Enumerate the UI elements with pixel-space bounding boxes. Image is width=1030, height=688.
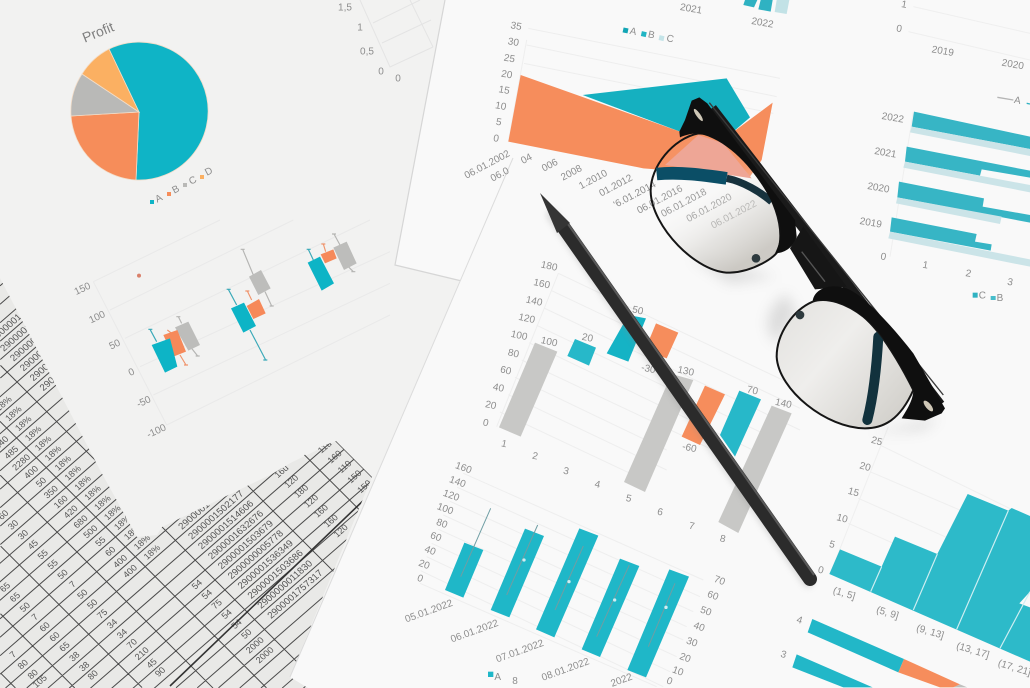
panel: spreadsheet table: 80 bbox=[85, 668, 100, 682]
panel: spreadsheet table: 18% bbox=[33, 434, 53, 453]
waterfall bar chart: 160 bbox=[532, 277, 551, 292]
teal column chart: 30 bbox=[685, 636, 699, 650]
panel: spreadsheet table: 11u bbox=[316, 439, 334, 455]
panel: spreadsheet table: 400 bbox=[111, 553, 129, 570]
panel: spreadsheet table: 75 bbox=[209, 597, 224, 611]
histogram: 15 bbox=[847, 486, 861, 500]
area date axis: 006 bbox=[540, 157, 560, 174]
area date axis: 06.0 bbox=[489, 165, 512, 184]
horizontal bar chart: 3 bbox=[1006, 277, 1014, 289]
histogram: 4 bbox=[795, 615, 804, 627]
teal column chart: 3 bbox=[562, 466, 570, 478]
right lens bbox=[777, 300, 913, 428]
panel: spreadsheet table: 18% bbox=[82, 483, 103, 502]
bars 2019 bbox=[890, 217, 992, 251]
panel: spreadsheet table: 2900000011830 bbox=[256, 558, 315, 611]
top axis labels and bars bbox=[679, 0, 789, 31]
panel: spreadsheet table: 2900001502177 bbox=[186, 489, 246, 542]
panel: spreadsheet table: 54 bbox=[199, 588, 214, 601]
teal column chart bbox=[404, 460, 727, 688]
panel: spreadsheet table: 50 bbox=[75, 587, 90, 601]
teal column chart: 05.01.2022 bbox=[404, 598, 455, 625]
area chart: 35 bbox=[510, 20, 523, 33]
waterfall bar chart: 130 bbox=[676, 365, 695, 379]
panel: spreadsheet table: 2900001514606 bbox=[8, 311, 68, 364]
legend: C bbox=[979, 290, 986, 301]
panel: area chart sheet bbox=[395, 0, 1030, 420]
temple seen through left lens bbox=[657, 173, 727, 178]
panel: spreadsheet table: 110 bbox=[336, 459, 353, 475]
panel: spreadsheet table: 18% bbox=[92, 493, 113, 512]
box plot chart bbox=[73, 220, 390, 441]
top axis labels and bars: 2021 bbox=[679, 2, 703, 17]
histogram: 5 bbox=[828, 539, 837, 551]
horizontal bar chart: 2019 bbox=[931, 44, 955, 59]
panel: spreadsheet table: 2900001514606 bbox=[196, 499, 256, 552]
histogram: (9, 13] bbox=[915, 623, 945, 642]
panel: spreadsheet table: 160 bbox=[325, 448, 344, 465]
panel: spreadsheet table: 7 bbox=[67, 579, 78, 589]
left brow bbox=[679, 97, 797, 253]
panel: spreadsheet table: 120 bbox=[282, 473, 301, 490]
histogram: 20 bbox=[858, 461, 872, 474]
box plot chart: 100 bbox=[87, 309, 108, 326]
panel: spreadsheet table: 400 bbox=[22, 464, 40, 481]
panel: spreadsheet table: 160 bbox=[322, 512, 340, 529]
teal column chart: 0 bbox=[416, 573, 425, 585]
histogram: (1, 5] bbox=[832, 585, 857, 603]
area chart: 25 bbox=[503, 53, 516, 65]
area date axis: 06.01.2022 bbox=[709, 198, 759, 232]
left lens tint over orange bbox=[665, 135, 752, 178]
area series teal bbox=[583, 78, 750, 142]
panel: spreadsheet table: 2900000005778 bbox=[226, 528, 286, 582]
panel: spreadsheet table: 45 bbox=[144, 657, 159, 670]
bars 2021 bbox=[905, 147, 1030, 178]
horizontal bar chart: 2021 bbox=[873, 146, 898, 161]
teal column chart: 8 bbox=[512, 676, 518, 687]
teal column chart: 60 bbox=[429, 530, 443, 545]
panel: spreadsheet table: 55 bbox=[45, 558, 60, 571]
teal column chart: 80 bbox=[435, 517, 449, 531]
glasses bbox=[651, 97, 945, 433]
area legend bbox=[623, 26, 675, 45]
panel: spreadsheet table: 45 bbox=[26, 538, 40, 551]
waterfall bar chart: 2 bbox=[531, 451, 539, 463]
panel: spreadsheet table: 485 bbox=[2, 444, 20, 461]
panel: spreadsheet table: 60 bbox=[103, 545, 118, 558]
panel: spreadsheet table: 2000 bbox=[254, 645, 276, 665]
panel: spreadsheet table: 50 bbox=[34, 475, 48, 489]
left lens bbox=[651, 133, 780, 273]
area chart: 10 bbox=[494, 100, 508, 113]
panel: spreadsheet table: 160 bbox=[52, 493, 70, 510]
panel: spreadsheet table: 150 bbox=[355, 478, 374, 495]
area date axis: 01.2012 bbox=[597, 172, 635, 199]
waterfall bar chart: -60 bbox=[681, 441, 698, 455]
teal column chart: A bbox=[494, 672, 501, 683]
right brow bbox=[813, 286, 945, 421]
area chart: 5 bbox=[495, 117, 503, 129]
area date axis: '6.01.2014 bbox=[612, 179, 658, 211]
panel: spreadsheet table: 75 bbox=[95, 607, 110, 621]
teal column chart: 6 bbox=[656, 507, 664, 519]
teal column chart: 50 bbox=[699, 605, 713, 619]
panel: spreadsheet table: 70 bbox=[125, 637, 139, 650]
panel: spreadsheet table: 680 bbox=[71, 513, 90, 530]
area chart: 0 bbox=[492, 133, 500, 145]
horizontal bar chart: 2020 bbox=[866, 181, 891, 196]
panel: spreadsheet table: 2900001502177 bbox=[28, 330, 88, 384]
teal column chart: 20 bbox=[417, 558, 432, 572]
waterfall bar chart: -30 bbox=[640, 362, 657, 376]
temple arm bbox=[712, 108, 940, 405]
pencil tip bbox=[540, 193, 570, 233]
panel: pie chart sheet bbox=[71, 18, 215, 205]
box plot chart: 150 bbox=[73, 281, 93, 298]
waterfall bar chart: 20 bbox=[581, 332, 594, 345]
area legend: B bbox=[647, 29, 656, 41]
teal column chart: 10 bbox=[671, 665, 685, 679]
area chart: 15 bbox=[498, 84, 511, 97]
panel: spreadsheet table: 16u bbox=[272, 463, 291, 480]
outlier dot bbox=[137, 274, 141, 278]
histogram: (13, 17] bbox=[955, 641, 991, 661]
histogram: (5, 9] bbox=[875, 605, 900, 622]
panel: spreadsheet table: 60 bbox=[47, 630, 62, 644]
horizontal bar chart: 1 bbox=[922, 260, 929, 272]
area date axis: 06.01.2002 bbox=[463, 148, 512, 182]
pencil bbox=[540, 193, 814, 582]
teal column chart: 40 bbox=[423, 544, 438, 558]
panel: spreadsheet table bbox=[0, 279, 372, 688]
area series orange bbox=[508, 75, 773, 177]
panel: spreadsheet table: 18% bbox=[142, 543, 162, 562]
panel: spreadsheet table: 30 bbox=[16, 528, 30, 542]
teal column chart: 40 bbox=[692, 620, 707, 635]
panel: spreadsheet table: 2900001632676 bbox=[206, 509, 266, 562]
teal column chart: 08.01.2022 bbox=[540, 656, 591, 684]
panel: spreadsheet table: 2000 bbox=[244, 635, 266, 655]
box plot chart: 0 bbox=[127, 366, 137, 379]
horizontal bar chart: 2022 bbox=[881, 111, 905, 126]
waterfall bar chart: 100 bbox=[510, 329, 529, 343]
panel: spreadsheet table: 18% bbox=[112, 513, 133, 532]
teal column chart: 120 bbox=[441, 488, 461, 504]
area date axis: 06.01.2018 bbox=[659, 187, 709, 220]
small chart: top of left sheet: 1,5 bbox=[338, 2, 352, 14]
panel: spreadsheet table: 60 bbox=[37, 620, 52, 634]
area chart: 30 bbox=[507, 36, 520, 49]
area date axis: 06.01.2016 bbox=[635, 183, 685, 217]
histogram: 25 bbox=[870, 435, 884, 449]
box plot chart: -100 bbox=[145, 422, 168, 441]
panel: spreadsheet table: 350 bbox=[42, 484, 60, 500]
small chart: top of left sheet bbox=[338, 0, 433, 84]
bridge bbox=[790, 227, 847, 289]
teal column chart: 100 bbox=[435, 501, 455, 518]
box plot chart: 50 bbox=[108, 337, 123, 352]
panel: spreadsheet table: 34 bbox=[105, 617, 119, 631]
waterfall bar chart bbox=[482, 260, 800, 533]
horizontal bar chart bbox=[859, 0, 1030, 304]
panel: spreadsheet table: 54 bbox=[190, 578, 204, 591]
small chart: top of left sheet: 0 bbox=[395, 74, 401, 84]
legend: B bbox=[997, 293, 1004, 304]
top axis labels and bars: 2022 bbox=[750, 16, 775, 31]
teal column chart: 20 bbox=[678, 651, 693, 666]
panel: spreadsheet table: 18% bbox=[132, 533, 152, 552]
panel: spreadsheet table: 2900001536349 bbox=[236, 538, 296, 592]
panel: spreadsheet table: 2900001757317 bbox=[265, 568, 326, 621]
panel: spreadsheet table: 120 bbox=[332, 522, 350, 539]
panel: spreadsheet table: 18% bbox=[53, 454, 73, 473]
panel: spreadsheet table: 2900001503679 bbox=[216, 518, 276, 572]
panel: spreadsheet table: 18% bbox=[3, 404, 24, 423]
pie chart bbox=[71, 42, 208, 180]
panel: spreadsheet table: 18% bbox=[122, 523, 142, 542]
panel: spreadsheet table: 2280 bbox=[10, 452, 32, 472]
pencil body bbox=[564, 228, 810, 579]
panel: spreadsheet table: 18% bbox=[62, 464, 83, 482]
panel: spreadsheet table: 50 bbox=[85, 597, 100, 611]
area legend: C bbox=[665, 33, 675, 45]
sheet edge bbox=[290, 158, 513, 677]
panel: spreadsheet table: 18% bbox=[43, 444, 63, 463]
legend bbox=[973, 290, 1004, 304]
panel: spreadsheet table: 2900001503686 bbox=[246, 548, 306, 601]
waterfall bar chart: 0 bbox=[482, 417, 490, 429]
area chart: 20 bbox=[500, 69, 514, 81]
teal column chart: 06.01.2022 bbox=[449, 618, 500, 645]
panel: spreadsheet table: 420 bbox=[61, 503, 80, 520]
horizontal bar chart: 2020 bbox=[1001, 58, 1025, 72]
panel: spreadsheet table: 50 bbox=[18, 600, 32, 614]
panel: right bar chart sheet bbox=[290, 158, 1030, 688]
area date axis: 06.01.2020 bbox=[685, 192, 734, 225]
pie legend: C bbox=[187, 174, 199, 188]
teal column chart: 7 bbox=[688, 521, 696, 533]
panel: spreadsheet table: 18% bbox=[13, 414, 34, 433]
area date axis: 2008 bbox=[559, 163, 584, 183]
histogram: 10 bbox=[835, 512, 849, 526]
teal column chart: 8 bbox=[719, 533, 727, 545]
pie legend: B bbox=[170, 183, 182, 196]
small chart: top of left sheet: 0,5 bbox=[360, 46, 374, 58]
panel: spreadsheet table: 38 bbox=[67, 650, 82, 663]
area legend: A bbox=[629, 26, 638, 38]
teal column chart: 4 bbox=[593, 479, 602, 491]
waterfall bar chart: 40 bbox=[492, 382, 505, 395]
panel: spreadsheet table: 54 bbox=[229, 617, 244, 631]
waterfall bar chart: 80 bbox=[507, 347, 520, 361]
panel: spreadsheet table: 160 bbox=[312, 503, 330, 519]
waterfall bar chart: 60 bbox=[499, 364, 513, 378]
panel: spreadsheet table: 30 bbox=[6, 518, 20, 532]
waterfall bar chart: 120 bbox=[517, 312, 536, 326]
teal column chart: 70 bbox=[712, 574, 727, 588]
panel: spreadsheet table: 18% bbox=[72, 473, 93, 492]
teal column chart: 60 bbox=[706, 589, 720, 603]
panel: spreadsheet table: 80 bbox=[16, 658, 30, 671]
waterfall bar chart: 140 bbox=[525, 295, 544, 309]
panel: spreadsheet table: 150 bbox=[345, 468, 364, 485]
pie legend: D bbox=[203, 165, 215, 179]
panel: spreadsheet table: 80 bbox=[25, 667, 40, 681]
panel: spreadsheet table: 180 bbox=[292, 483, 310, 500]
teal column chart: 0 bbox=[665, 676, 674, 688]
panel: spreadsheet table: 500 bbox=[81, 523, 100, 540]
panel: spreadsheet table: 65 bbox=[57, 640, 72, 653]
heading: Profit: Profit bbox=[80, 18, 116, 46]
histogram bbox=[779, 427, 1030, 687]
panel: spreadsheet table: 38 bbox=[77, 660, 92, 673]
panel: spreadsheet table: 34 bbox=[115, 627, 129, 640]
panel: spreadsheet table: 90 bbox=[153, 665, 167, 679]
panel: spreadsheet table: 120 bbox=[302, 493, 320, 510]
panel: spreadsheet table: 54 bbox=[219, 607, 234, 621]
horizontal bar chart: 0 bbox=[895, 23, 903, 35]
pie legend: A bbox=[153, 192, 165, 205]
area date axis: 04 bbox=[519, 152, 535, 167]
sheet edge bbox=[395, 0, 470, 283]
waterfall bar chart: 1 bbox=[500, 438, 508, 450]
teal column chart: 07.01.2022 bbox=[495, 638, 546, 665]
horizontal bar chart: 2019 bbox=[859, 216, 883, 231]
bars 2022 bbox=[912, 112, 1030, 149]
panel: spreadsheet table: 7 bbox=[8, 649, 18, 660]
teal column chart: 160 bbox=[454, 460, 473, 477]
waterfall bar chart: 100 bbox=[540, 335, 559, 350]
panel: spreadsheet table: 50 bbox=[55, 567, 70, 581]
panel: spreadsheet table: 55 bbox=[93, 535, 108, 548]
histogram: 0 bbox=[817, 565, 825, 577]
waterfall bar chart: 20 bbox=[484, 399, 498, 412]
box plot chart: -50 bbox=[135, 394, 153, 410]
bars 2020 bbox=[897, 182, 1030, 223]
area date axis bbox=[463, 148, 759, 232]
histogram: 3 bbox=[779, 649, 788, 661]
horizontal bar chart: A bbox=[1013, 95, 1022, 107]
panel: spreadsheet table: 210 bbox=[133, 645, 151, 662]
panel: spreadsheet table: 7 bbox=[29, 612, 40, 622]
rivets and nose pads bbox=[692, 108, 935, 413]
panel: spreadsheet table: 55 bbox=[35, 548, 50, 561]
small chart: top of left sheet: 1 bbox=[357, 22, 363, 34]
area chart bbox=[463, 20, 780, 232]
panel: spreadsheet table: 65 bbox=[8, 590, 22, 604]
panel: spreadsheet table: 50 bbox=[239, 627, 254, 641]
waterfall bar chart: 70 bbox=[746, 384, 759, 398]
waterfall bar chart: 180 bbox=[540, 260, 559, 274]
small chart: top of left sheet: 0 bbox=[378, 66, 384, 78]
panel: spreadsheet table: 2900001 bbox=[176, 500, 212, 532]
area date axis: 1.2010 bbox=[577, 168, 610, 192]
panel: spreadsheet table: 2900001536349 bbox=[38, 340, 98, 394]
waterfall bar chart: 50 bbox=[631, 304, 645, 318]
panel: spreadsheet table: 18% bbox=[23, 424, 44, 443]
panel: spreadsheet table: 400 bbox=[121, 563, 139, 580]
horizontal bar chart: 2 bbox=[965, 268, 972, 280]
teal column chart: 5 bbox=[625, 493, 633, 505]
panel: spreadsheet table: 2900001632676 bbox=[18, 320, 78, 374]
pie legend bbox=[150, 165, 215, 205]
panel: spreadsheet table: 18% bbox=[102, 503, 123, 522]
horizontal bar chart: 0 bbox=[880, 251, 887, 263]
waterfall bar chart: 140 bbox=[774, 397, 793, 411]
glasses shadow bbox=[690, 257, 940, 433]
temple seen through right lens bbox=[867, 337, 878, 420]
teal column chart: 140 bbox=[448, 474, 467, 491]
